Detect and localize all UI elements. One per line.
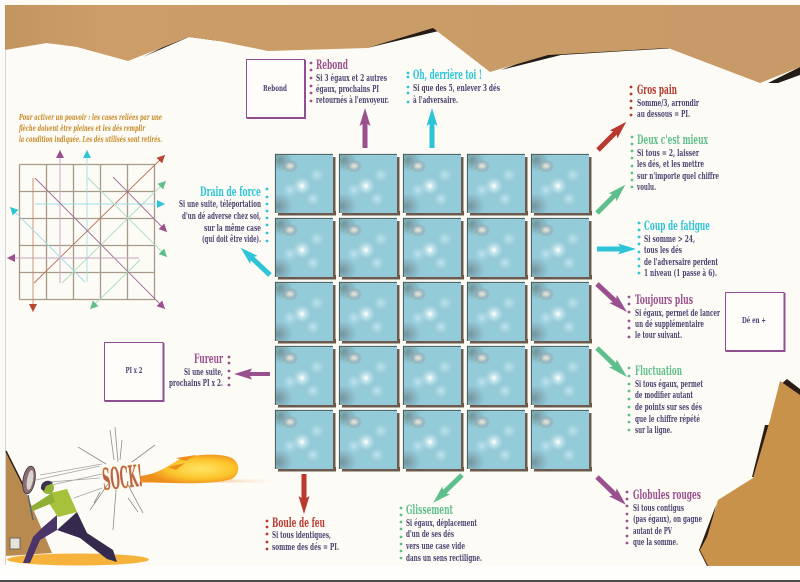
illustration: hero with frying pan [21,465,117,563]
text: Coup de fatigue [638,219,719,279]
text: Drain de force: Drain de force [200,185,261,200]
text: Globules rouges [626,488,702,548]
text: Deux c'est mieux: les dés, et les mettre [637,159,704,170]
box: PI x 2 [104,342,164,402]
text: Coup de fatigue: Si somme > 24, [644,235,695,245]
text: Boule de feu: somme des dés = PI. [272,542,339,553]
text: Deux c'est mieux: voulu. [636,183,656,193]
text: Deux c'est mieux: sur n'importe quel chiffre [637,172,719,182]
text: Glissement: vers une case vide [405,542,465,552]
instruction note: la condition indiquée. Les dés utilisés sont retirés. [19,134,162,144]
text: Glissement [400,503,482,564]
right rock [699,379,800,566]
text: Globules rouges: (pas égaux), on gagne [633,514,702,525]
arrow: Oh, derrière toi [426,108,438,148]
text: Fluctuation: que le chiffre répété [635,414,700,425]
illustration: signature logo [10,538,20,549]
text: Gros pain: Gros pain [637,83,677,98]
text: Toujours plus: un dé supplémentaire [635,319,704,330]
text: Fluctuation: Si tous égaux, permet [635,379,704,390]
text: Fluctuation: sur la ligne. [635,426,672,436]
arrow: Boule de feu [298,474,310,514]
arrow: Globules rouges [593,473,630,509]
text: Coup de fatigue: 1 niveau (1 passe à 6). [644,268,717,279]
arrow: Deux c'est mieux [593,181,629,217]
box: Rebond: Rebond [263,83,287,93]
text: Fureur: Fureur [194,352,223,367]
text: Coup de fatigue: de l'adversaire perdent [644,258,719,268]
text: Drain de force: d'un dé adverse chez soi, [182,211,261,222]
text: Toujours plus [628,293,720,341]
arrow: Gros pain [594,118,630,154]
text: Deux c'est mieux [631,133,719,193]
text: Fureur: prochains PI x 2. [169,379,223,389]
box: PI x 2: PI x 2 [126,365,142,375]
text: Rebond: Rebond [316,58,348,73]
box: Rebond [246,60,306,119]
text: Globules rouges: que la somme. [633,538,678,548]
text: Rebond: retournés à l'envoyeur. [316,95,389,106]
text: Deux c'est mieux: Si tous = 2, laisser [637,149,699,159]
text: Rebond: égaux, prochains PI [316,84,379,95]
text: Gros pain: au dessous = PI. [637,110,690,120]
text: Boule de feu: Si tous identiques, [272,531,331,541]
left rock [6,451,52,556]
text: Boule de feu [266,516,339,553]
arrow: Glissement [429,471,466,507]
text: Fluctuation: Fluctuation [635,364,682,379]
text: Oh, derrière toi: Si que des 5, enlever 3 dés [413,83,500,94]
text: Rebond [310,58,389,106]
text: Fluctuation [628,364,704,436]
text: Oh, derrière toi [407,68,500,106]
text: Oh, derrière toi: Oh, derrière toi ! [413,68,482,83]
text: Coup de fatigue: Coup de fatigue [644,219,710,234]
text: Glissement: d'un de ses dés [406,529,454,540]
text: Globules rouges: Si tous contigus [633,504,684,514]
text: Drain de force [179,185,268,245]
illustration: fireball [140,455,275,483]
text: Fluctuation: de points sur ses dés [635,402,702,413]
text: SOCK! [101,459,144,498]
instruction note [18,112,162,144]
text: Globules rouges: Globules rouges [633,488,701,503]
illustration: impact burst with SOCK lettering [78,427,155,530]
top rock band [5,5,800,83]
text: Toujours plus: Toujours plus [635,293,693,308]
text: Drain de force: (qui doit être vide). [202,234,261,245]
text: Toujours plus: le tour suivant. [635,331,682,341]
arrow: Rebond [360,108,370,148]
text: Glissement: Glissement [406,503,453,518]
text: Coup de fatigue: tous les dés [644,245,682,256]
text: Gros pain [630,83,699,120]
arrow: Drain de force [237,244,274,279]
main 5x5 tile board [263,148,592,475]
arrow: Coup de fatigue [597,244,636,254]
illustration: ground ellipse [7,554,149,566]
arrow: Toujours plus [593,280,631,316]
text: Gros pain: Somme/3, arrondir [637,99,699,109]
text: Toujours plus: Si égaux, permet de lancer [635,308,720,319]
instruction note: flèche doivent être pleines et les dés remplir [18,123,145,133]
illustration: speed lines [36,464,102,498]
text: Rebond: Si 3 égaux et 2 autres [316,73,387,84]
instruction note: Pour activer un pouvoir : les cases reliées par une [18,112,162,122]
box: Dé en + [726,292,786,352]
small diagram: grid with arrows [7,150,167,312]
text: Oh, derrière toi: à l'adversaire. [413,95,458,106]
arrow: Fureur [234,368,270,380]
text: Globules rouges: autant de PV [633,527,673,537]
text: Fureur [169,352,230,389]
text: Fureur: Si une suite, [184,368,223,378]
text: Glissement: Si égaux, déplacement [406,518,478,529]
text: Deux c'est mieux: Deux c'est mieux [637,133,708,148]
text: Boule de feu: Boule de feu [272,516,325,531]
text: Fluctuation: de modifier autant [635,391,694,401]
text: Drain de force: sur la même case [204,223,261,234]
text: Drain de force: Si une suite, téléportation [179,199,261,210]
text: Glissement: dans un sens rectiligne. [406,554,482,564]
arrow: Fluctuation [593,344,631,381]
box: Dé en +: Dé en + [742,315,766,325]
